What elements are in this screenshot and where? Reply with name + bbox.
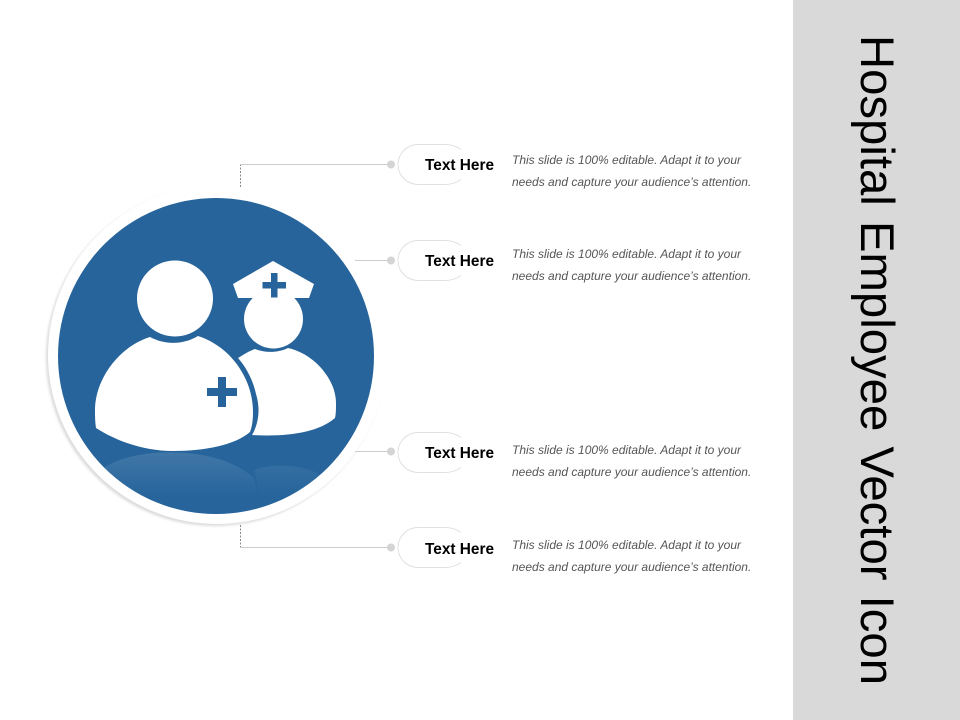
badge blue disc bbox=[58, 198, 374, 514]
icon: doctor bbox=[95, 260, 253, 451]
description: item 1: needs and capture your audience’s attention. bbox=[512, 175, 751, 189]
description: item 4: needs and capture your audience’s attention. bbox=[512, 560, 751, 574]
icon: nurse bbox=[233, 261, 336, 435]
diagram artwork bbox=[45, 144, 462, 568]
description: item 4: This slide is 100% editable. Adapt it to your bbox=[512, 538, 741, 552]
badge outer ring bbox=[46, 186, 386, 526]
label: item 3: Text Here bbox=[425, 445, 494, 462]
description: item 4 bbox=[512, 538, 751, 574]
connector: bottom bbox=[240, 525, 395, 552]
description: item 3: needs and capture your audience’s attention. bbox=[512, 465, 751, 479]
connector: top bbox=[240, 160, 395, 187]
floor reflection bbox=[104, 452, 320, 483]
label: item 2: Text Here bbox=[425, 253, 494, 270]
label pill outlines bbox=[398, 144, 461, 568]
nurse cap cross bbox=[262, 273, 286, 298]
connector: third bbox=[355, 448, 395, 456]
description: item 2: This slide is 100% editable. Adapt it to your bbox=[512, 247, 741, 261]
title: Hospital Employee Vector Icon bbox=[850, 35, 902, 685]
connector: second bbox=[355, 256, 395, 264]
description: item 3: This slide is 100% editable. Adapt it to your bbox=[512, 443, 741, 457]
icon: medical staff badge bbox=[46, 186, 386, 526]
panel: title sidebar bbox=[793, 0, 960, 720]
doctor body cross bbox=[207, 377, 237, 407]
description: item 3 bbox=[512, 443, 751, 479]
description: item 1 bbox=[512, 153, 751, 189]
label: item 4: Text Here bbox=[425, 541, 494, 558]
description: item 2 bbox=[512, 247, 751, 283]
description: item 2: needs and capture your audience’s attention. bbox=[512, 269, 751, 283]
label: item 1: Text Here bbox=[425, 157, 494, 174]
description: item 1: This slide is 100% editable. Adapt it to your bbox=[512, 153, 741, 167]
